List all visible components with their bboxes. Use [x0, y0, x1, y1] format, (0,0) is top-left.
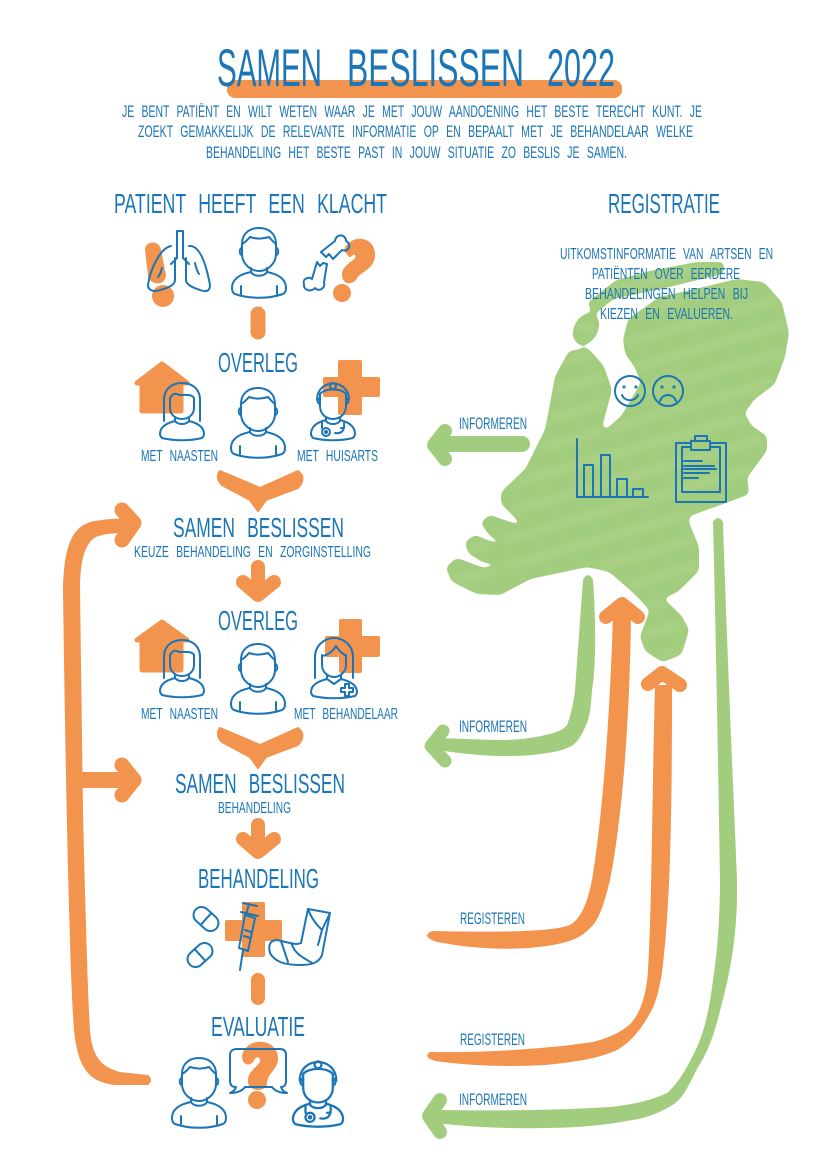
icon: patient 2 — [231, 388, 285, 458]
icon: patient 3 — [231, 644, 285, 714]
title: BESLISSEN — [347, 39, 524, 98]
icon: doctor evaluation — [293, 1061, 343, 1127]
text: uitkomstinformatie: KIEZEN EN EVALUEREN. — [600, 306, 733, 323]
label: informeren 3: INFORMEREN — [459, 1090, 527, 1109]
connector: arrow down 2 — [243, 825, 274, 852]
icon: cast — [269, 909, 330, 965]
connector: dash 2 — [251, 980, 265, 998]
label: informeren 2: INFORMEREN — [459, 717, 527, 736]
heading: overleg 2: OVERLEG — [218, 605, 298, 636]
intro text — [122, 103, 702, 162]
label: met naasten: MET NAASTEN — [141, 448, 218, 465]
connector: arrow down 1 — [243, 567, 274, 595]
icon: clipboard — [676, 436, 726, 502]
label: met behandelaar: MET BEHANDELAAR — [294, 706, 398, 723]
icon: syringe — [239, 903, 258, 970]
icon: happy face — [615, 376, 645, 406]
label: registeren 1: REGISTEREN — [460, 909, 525, 928]
connector: chevron 1 — [218, 471, 302, 511]
subheading: behandeling: BEHANDELING — [218, 800, 291, 817]
arrow: registeren orange 2 — [427, 673, 680, 1066]
icon: woman relative 2 — [160, 640, 204, 697]
heading: overleg 1: OVERLEG — [218, 347, 298, 378]
connector: chevron 2 — [218, 728, 302, 768]
heading: evaluatie: EVALUATIE — [211, 1011, 305, 1042]
icon: lungs — [148, 231, 210, 291]
icon: general practitioner — [311, 383, 355, 440]
icon: pill 2 — [184, 940, 216, 970]
icon: patient 4 — [172, 1058, 226, 1128]
icon: exclamation mark — [145, 242, 174, 307]
title: 2022 — [547, 39, 615, 98]
icon: patient 1 — [232, 228, 286, 298]
arrow: feedback loop left — [63, 510, 151, 1085]
heading: behandeling: BEHANDELING — [198, 863, 319, 894]
icon: pill 1 — [190, 904, 222, 934]
arrow: informeren long green — [429, 518, 737, 1132]
label: met huisarts: MET HUISARTS — [297, 448, 378, 465]
text: uitkomstinformatie: PATIËNTEN OVER EERDERE — [592, 265, 740, 283]
connector: dash 1 — [250, 314, 266, 332]
label: met naasten 2: MET NAASTEN — [141, 706, 218, 723]
title underline — [227, 80, 622, 98]
map of the Netherlands — [448, 264, 787, 660]
icon: woman relative — [160, 383, 204, 440]
heading: samen beslissen 2: SAMEN BESLISSEN — [175, 768, 345, 799]
heading: patient heeft een klacht: PATIENT HEEFT EEN KLACHT — [114, 188, 387, 219]
subheading: keuze behandeling: KEUZE BEHANDELING EN ZORGINSTELLING — [134, 544, 371, 561]
heading: registratie: REGISTRATIE — [608, 188, 720, 219]
icon: orange cross treatment — [227, 904, 280, 955]
icon: orange cross — [325, 362, 378, 413]
icon: bar chart — [577, 439, 648, 497]
icon: speech bubble — [230, 1049, 287, 1093]
heading: samen beslissen 1: SAMEN BESLISSEN — [173, 512, 344, 543]
icon: question mark evaluation — [243, 1043, 277, 1109]
title: SAMEN — [217, 39, 322, 98]
icon: nurse practitioner — [311, 638, 357, 698]
text: uitkomstinformatie — [560, 246, 773, 323]
icon: orange cross 2 — [327, 621, 378, 671]
text: uitkomstinformatie: BEHANDELINGEN HELPEN BIJ — [585, 286, 748, 303]
title — [217, 39, 622, 98]
icon: house — [137, 364, 187, 411]
icon: broken bone — [304, 235, 349, 290]
arrow: informeren map to overleg — [434, 431, 522, 459]
arrow: registeren orange 1 — [427, 604, 638, 949]
icon: sad face — [653, 376, 683, 406]
arrow: informeren green to second overleg — [431, 575, 595, 761]
label: informeren 1: INFORMEREN — [459, 414, 527, 433]
icon: house 2 — [137, 622, 187, 670]
icon: question mark — [333, 241, 373, 302]
label: registeren 2: REGISTEREN — [460, 1030, 525, 1049]
